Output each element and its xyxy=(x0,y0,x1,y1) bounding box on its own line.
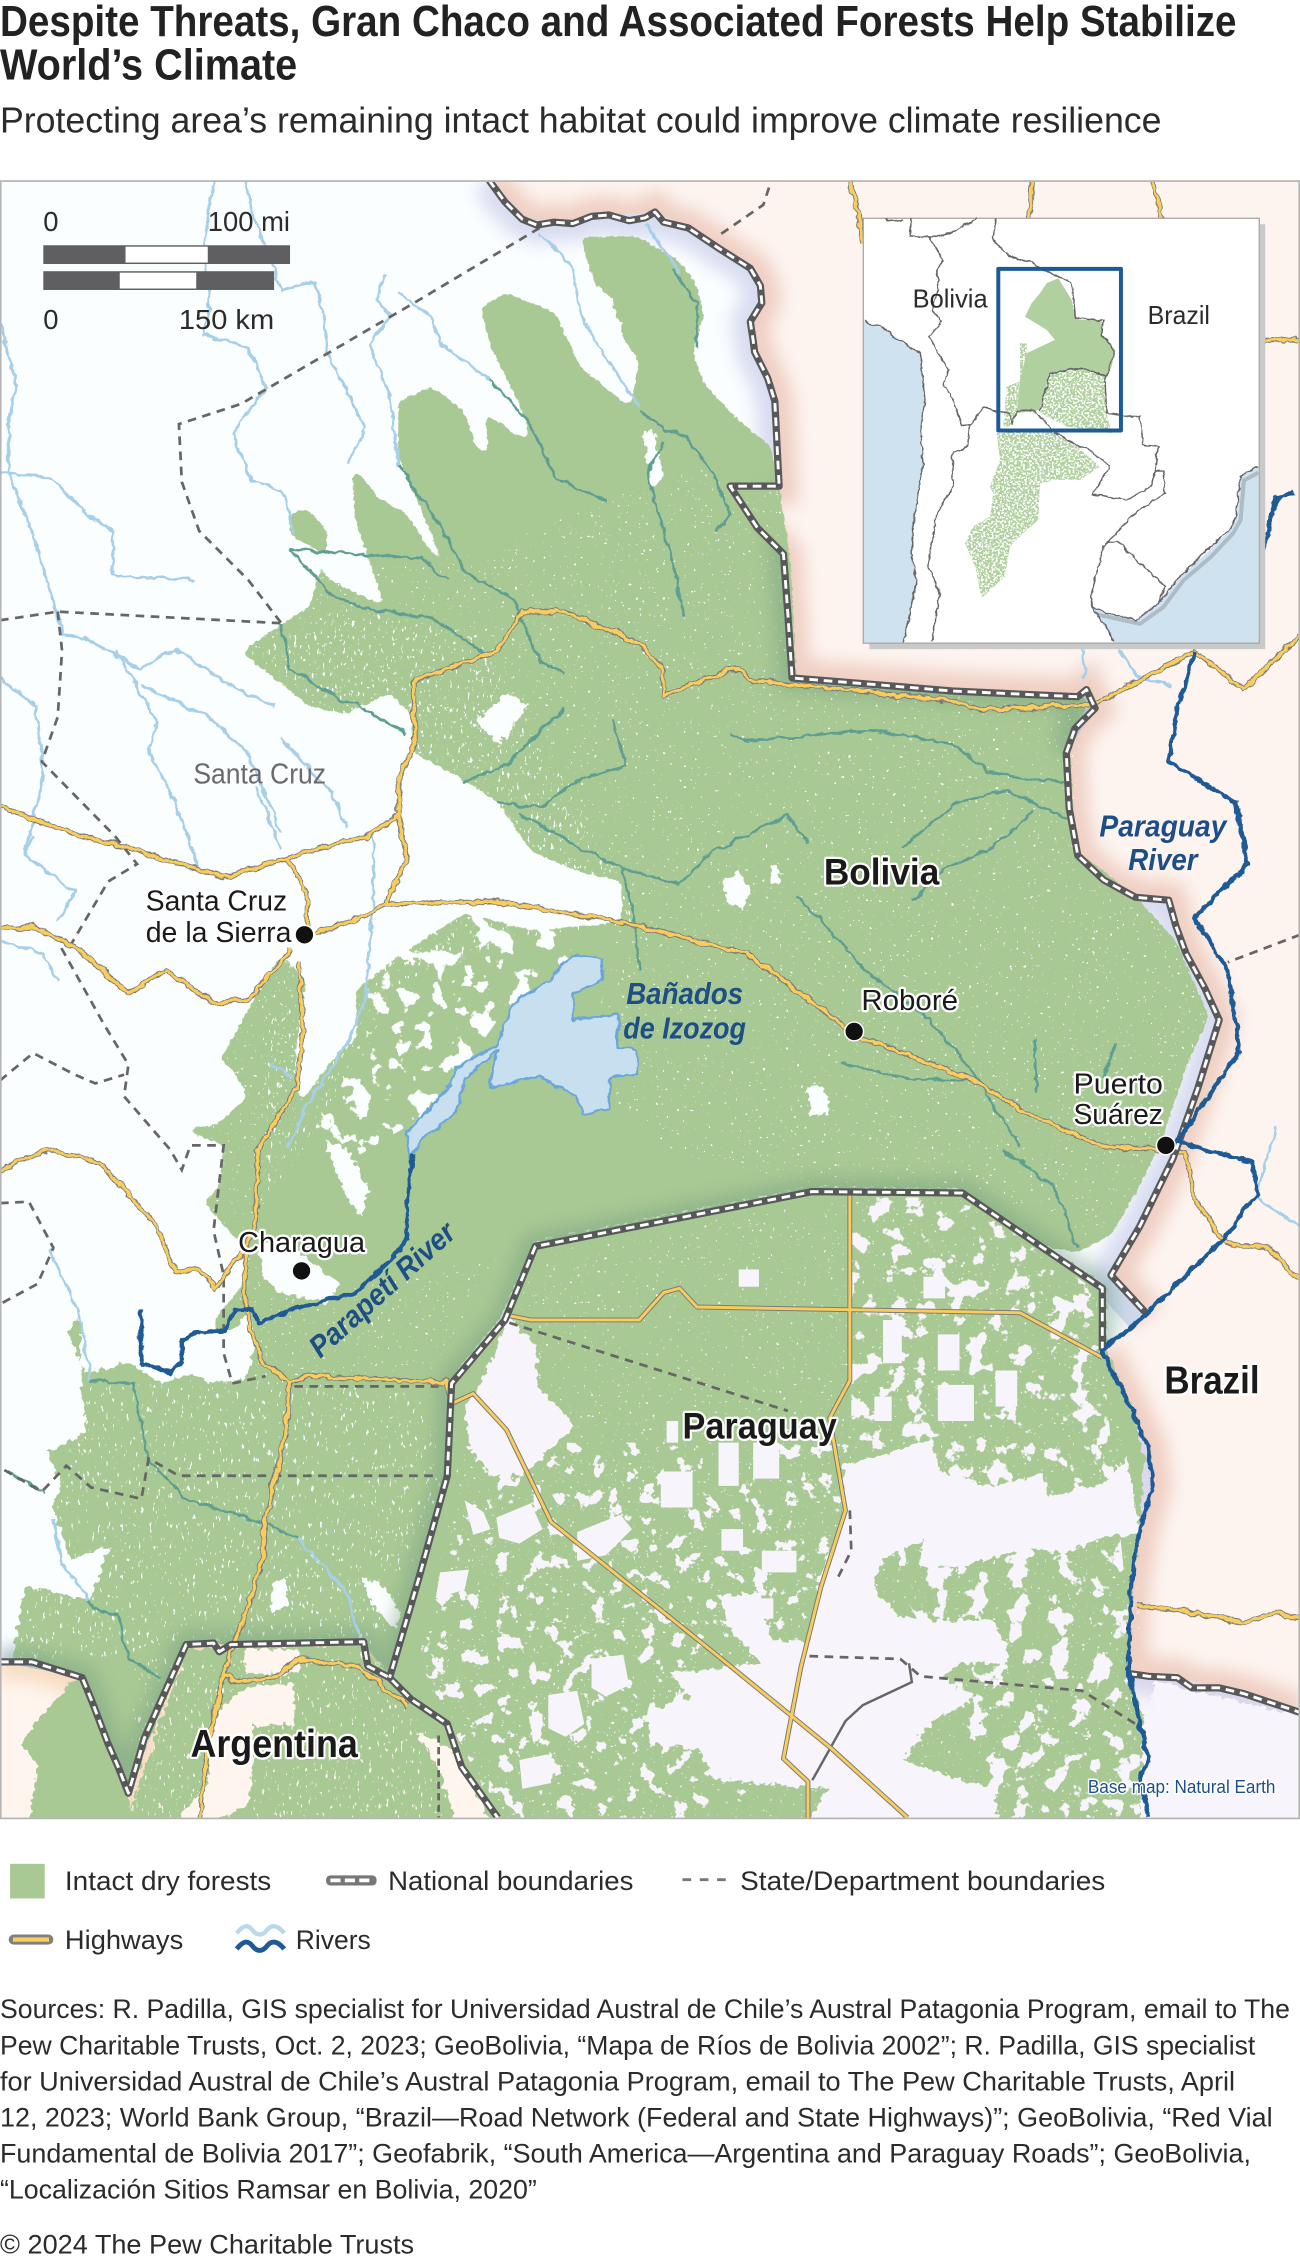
forest: Paraguay xyxy=(390,1186,1144,1821)
national boundaries xyxy=(0,180,1300,1818)
scale bar: 0 xyxy=(43,304,59,335)
inset country borders xyxy=(864,218,1258,642)
map labels xyxy=(146,758,1275,1797)
region: Brazil xyxy=(476,180,1300,1724)
legend item: rivers: Rivers xyxy=(296,1925,371,1955)
sources: Fundamental de Bolivia 2017”; Geofabrik, “South America—Argentina and Paraguay Roads”; GeoBolivia, xyxy=(0,2138,1251,2168)
label: Bañados de Izozog xyxy=(623,978,746,1046)
fragmented forest: Argentina peach patches xyxy=(130,1649,491,1821)
inset locator map xyxy=(863,218,1265,649)
legend item: highways xyxy=(9,1925,183,1955)
map panel xyxy=(0,180,1300,1821)
forest: Argentina west xyxy=(20,1678,133,1821)
non-forest: southeast expanse xyxy=(649,1440,1140,1821)
region: Bolivia border glow xyxy=(0,180,1219,1678)
straight highways in Paraguay xyxy=(452,1192,1102,1818)
sources: Pew Charitable Trusts, Oct. 2, 2023; GeoBolivia, “Mapa de Ríos de Bolivia 2002”; R. Padilla, GIS specialist xyxy=(0,2030,1256,2060)
map frame xyxy=(1,181,1299,1818)
scale bar: 100 mi xyxy=(208,206,290,237)
forest: southwest and Paraguay xyxy=(14,1186,1144,1821)
inset forest xyxy=(965,278,1115,598)
legend item: national boundaries: National boundaries xyxy=(388,1866,633,1896)
forest vignette along borders xyxy=(0,486,1102,1818)
label: Paraguay River: Paraguay xyxy=(1099,811,1228,844)
label: Paraguay River: River xyxy=(1128,844,1200,877)
legend item: intact dry forests xyxy=(10,1864,271,1898)
scale bar: 0 xyxy=(43,206,59,237)
legend item: highways: Highways xyxy=(65,1925,183,1955)
scale bar: 150 km xyxy=(179,304,274,335)
forest: Bolivia xyxy=(179,237,1209,1383)
state and department boundaries xyxy=(0,188,1300,1818)
label: Parapetí River: Parapetí River xyxy=(303,1215,464,1364)
label: Puerto Suárez: Suárez xyxy=(1073,1099,1163,1131)
teal rivers in forest xyxy=(7,268,1115,1679)
sources: “Localización Sitios Ramsar en Bolivia, 2020” xyxy=(0,2175,537,2205)
highways xyxy=(0,180,1300,1818)
credit: base map: Base map: Natural Earth xyxy=(1088,1777,1275,1797)
inset label: Brazil: Brazil xyxy=(1148,300,1210,330)
label: Puerto Suárez: Puerto xyxy=(1073,1068,1163,1100)
title xyxy=(0,0,1237,89)
sources: for Universidad Austral de Chile’s Austral Patagonia Program, email to The Pew Charitable Trusts, April xyxy=(0,2066,1235,2096)
label: Santa Cruz de la Sierra: de la Sierra xyxy=(146,917,292,949)
label: Puerto Suárez xyxy=(1073,1068,1175,1155)
legend item: intact dry forests: Intact dry forests xyxy=(65,1866,271,1896)
label: Santa Cruz de la Sierra xyxy=(146,885,314,949)
sources: Sources: R. Padilla, GIS specialist for Universidad Austral de Chile’s Austral Patagonia Program, email to The xyxy=(0,1994,1290,2024)
label: Charagua: Charagua xyxy=(238,1227,366,1259)
legend item: state boundaries: State/Department boundaries xyxy=(740,1866,1105,1896)
label: Paraguay River xyxy=(1099,811,1228,877)
fragmented forest: non-forest patches Bolivia xyxy=(202,284,1209,1630)
label: Roboré: Roboré xyxy=(861,985,958,1017)
label: Bañados de Izozog: Bañados xyxy=(626,978,743,1011)
label: Paraguay: Paraguay xyxy=(682,1404,837,1446)
legend xyxy=(9,1864,1105,1955)
legend item: rivers xyxy=(237,1925,371,1955)
river: Parapetí xyxy=(141,1154,413,1372)
label: Santa Cruz department: Santa Cruz xyxy=(193,758,326,790)
lake: Bañados de Izozog xyxy=(407,954,638,1158)
sources xyxy=(0,1994,1290,2205)
label: Santa Cruz de la Sierra: Santa Cruz xyxy=(146,885,287,917)
non-forest: solid clearings xyxy=(215,284,828,1630)
intact dry forests xyxy=(14,237,1209,1821)
title: World’s Climate xyxy=(0,41,297,89)
subtitle: Protecting area’s remaining intact habitat could improve climate resilience xyxy=(0,100,1161,141)
label: Bolivia: Bolivia xyxy=(824,850,940,892)
label: Argentina: Argentina xyxy=(190,1723,358,1766)
region: Argentina xyxy=(0,1642,505,1818)
forest: Argentina east xyxy=(130,1645,498,1821)
inset oceans xyxy=(864,322,1259,642)
scale bar xyxy=(43,206,290,335)
light rivers xyxy=(0,180,1300,1640)
non-forest: northwest patch xyxy=(465,1317,576,1476)
label: Charagua xyxy=(238,1227,366,1280)
inset locator rectangle xyxy=(998,269,1121,431)
non-forest: blocks xyxy=(661,1269,1017,1619)
label: Bañados de Izozog: de Izozog xyxy=(623,1013,746,1046)
sources: 12, 2023; World Bank Group, “Brazil—Road Network (Federal and State Highways)”; GeoBolivia, “Red Vial xyxy=(0,2102,1273,2132)
region: Paraguay xyxy=(1128,1424,1298,1818)
copyright: © 2024 The Pew Charitable Trusts xyxy=(0,2229,414,2259)
inset coast shadow xyxy=(1098,473,1259,624)
label: Brazil: Brazil xyxy=(1164,1360,1260,1403)
label: Roboré xyxy=(845,985,958,1041)
river: Paraguay xyxy=(1102,493,1294,1818)
fragmented forest: southwest speckle xyxy=(14,1378,440,1659)
inset label: Bolivia: Bolivia xyxy=(913,284,988,314)
fragmented forest: Paraguay speckle xyxy=(418,1197,1300,1821)
